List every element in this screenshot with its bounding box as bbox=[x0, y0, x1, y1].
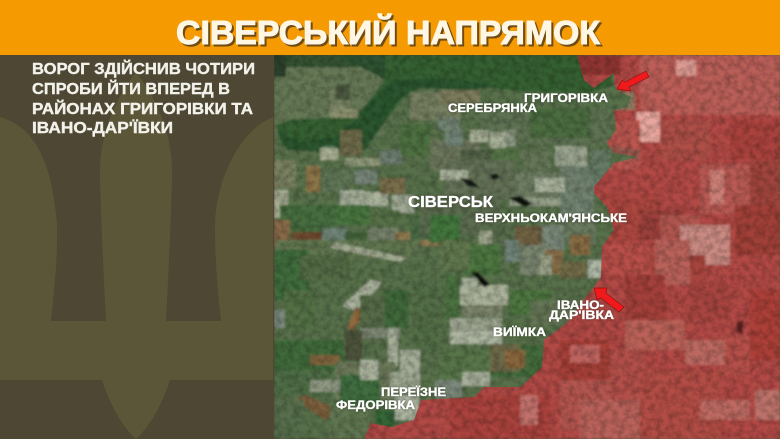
label: Fedorivka: ФЕДОРІВКА bbox=[336, 398, 415, 412]
label: Hryhorivka: ГРИГОРІВКА bbox=[524, 91, 608, 105]
summary text: ІВАНО-ДАР'ЇВКИ bbox=[32, 119, 173, 137]
header bar bbox=[0, 0, 780, 55]
label: Serebrianka: СЕРЕБРЯНКА bbox=[448, 101, 537, 115]
summary text: ВОРОГ ЗДІЙСНИВ ЧОТИРИ bbox=[32, 59, 255, 78]
label: Pereizne: ПЕРЕЇЗНЕ bbox=[381, 384, 446, 399]
summary text bbox=[32, 59, 255, 137]
arrow: toward Ivano-Darivka bbox=[594, 288, 624, 312]
summary text: РАЙОНАХ ГРИГОРІВКИ ТА bbox=[32, 99, 253, 118]
label: Siversk: СІВЕРСЬК bbox=[408, 194, 493, 211]
title shadow: СІВЕРСЬКИЙ НАПРЯМОК bbox=[178, 15, 603, 53]
label: Ivano-Darivka: ІВАНО- bbox=[557, 298, 604, 312]
occupied territory overlay bbox=[364, 55, 780, 439]
map labels: ДАР'ІВКА bbox=[549, 308, 614, 322]
summary text: СПРОБИ ЙТИ ВПЕРЕД В bbox=[32, 79, 230, 98]
label: Vyimka: ВИЇМКА bbox=[493, 324, 546, 339]
title: СІВЕРСЬКИЙ НАПРЯМОК bbox=[176, 13, 601, 51]
satellite map bbox=[274, 55, 780, 439]
left panel bbox=[0, 54, 274, 439]
icon: trident emblem bbox=[0, 72, 273, 439]
map labels bbox=[336, 91, 627, 412]
arrow: toward Hryhorivka bbox=[617, 71, 649, 91]
label: Verkhnokamianske: ВЕРХНЬОКАМ'ЯНСЬКЕ bbox=[475, 211, 627, 225]
terrain grain bbox=[274, 55, 780, 439]
